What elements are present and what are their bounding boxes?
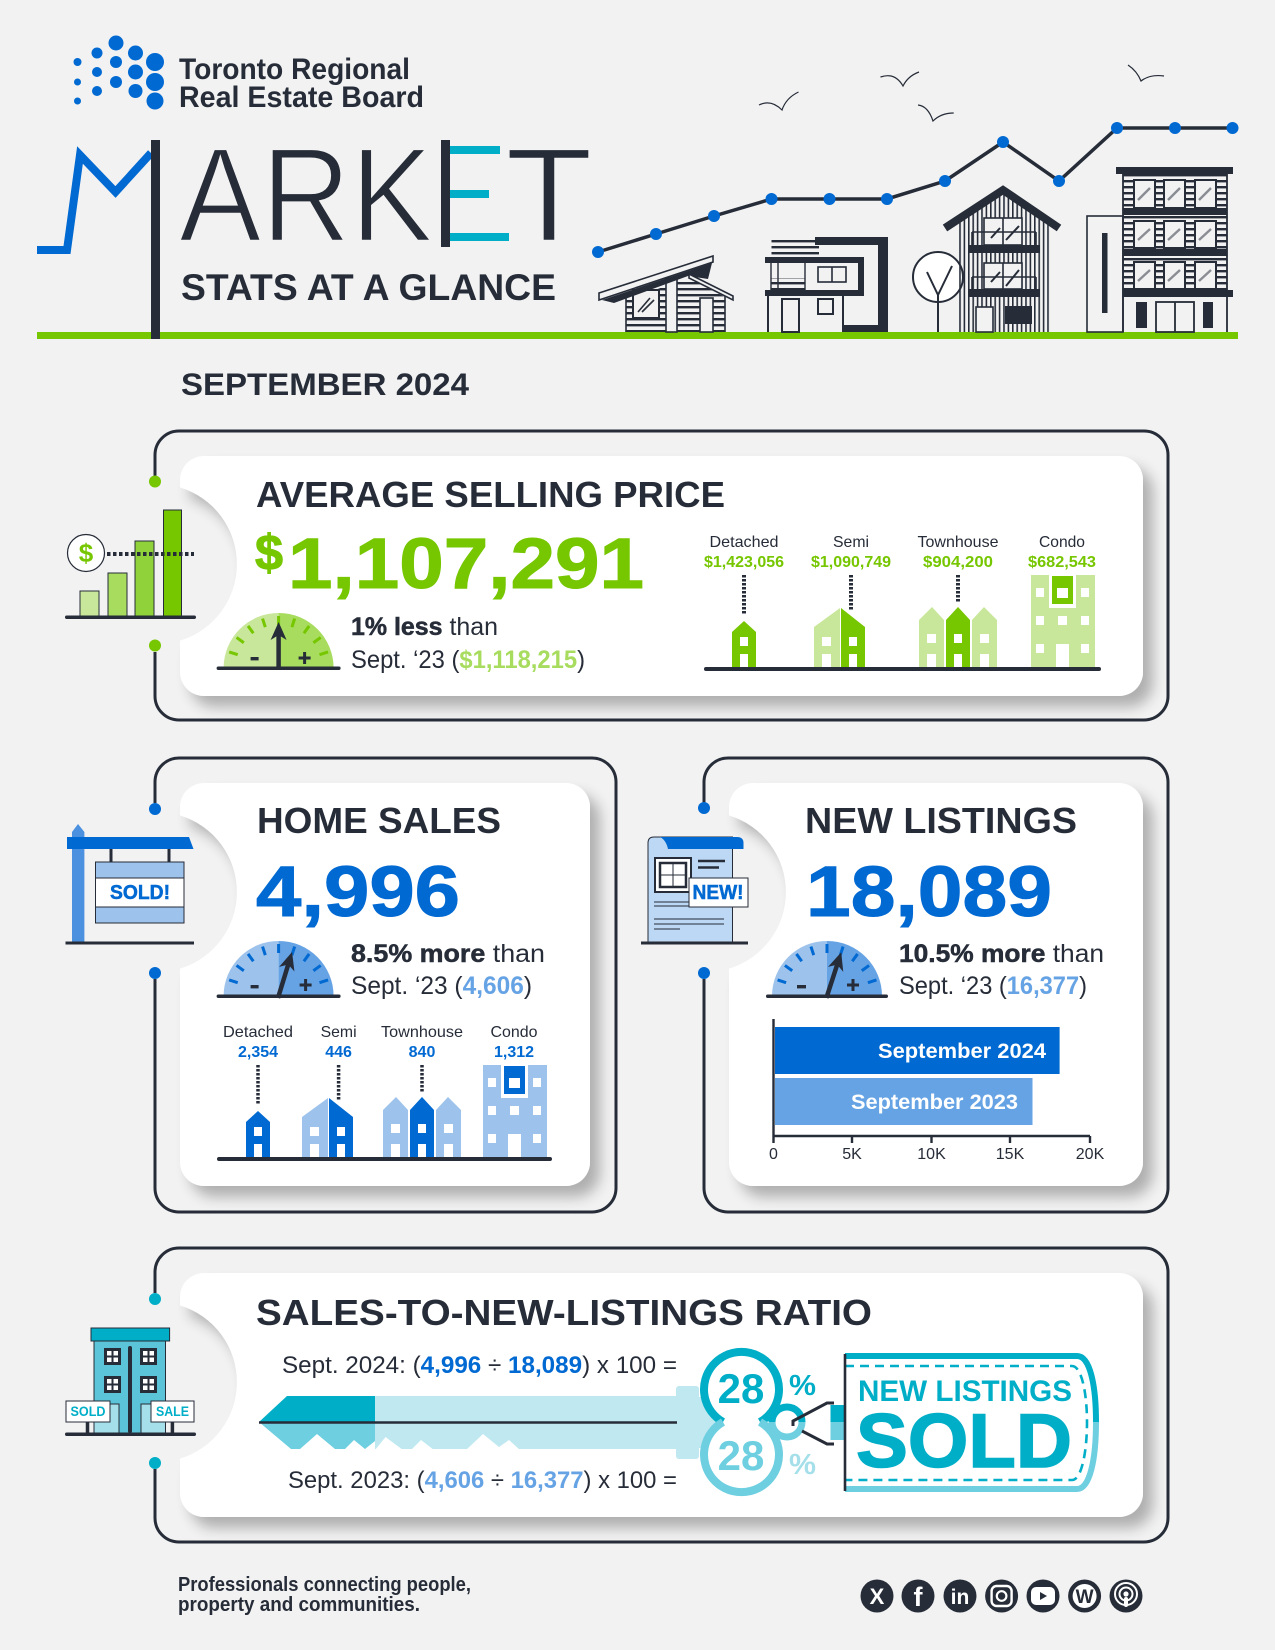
heading: SALES-TO-NEW-LISTINGS RATIO — [256, 1292, 872, 1333]
breakdown by home type: 1,312 — [494, 1044, 534, 1061]
white card — [729, 783, 1143, 1186]
logo: Toronto Regional Real Estate Board — [74, 36, 424, 114]
gauge — [217, 613, 341, 670]
axes — [774, 1019, 1090, 1143]
connector dot top — [149, 1293, 161, 1305]
icon: LinkedIn — [944, 1580, 976, 1612]
title: MARKET — [37, 121, 593, 270]
letter T: T — [505, 121, 593, 270]
result ring 2024: 28%: 28 — [718, 1365, 764, 1412]
connector dot top — [698, 802, 710, 814]
icon: townhouse — [383, 1097, 461, 1157]
icon: Instagram — [985, 1580, 1018, 1612]
logo text: Real Estate Board — [179, 81, 424, 114]
heading: HOME SALES — [257, 800, 501, 841]
white card — [180, 456, 1143, 696]
subtitle: STATS AT A GLANCE — [181, 267, 556, 308]
big number: $ — [255, 525, 283, 581]
panel outline — [155, 431, 1168, 720]
icon: new listing document: NEW! — [692, 882, 744, 904]
social icons — [860, 1580, 1142, 1612]
icon: detached — [732, 621, 756, 667]
big number: 18,089 — [806, 853, 1052, 932]
axis labels: 10K — [917, 1146, 946, 1163]
bar: September 2023: September 2023 — [851, 1091, 1018, 1114]
breakdown by home type: $904,200 — [923, 554, 993, 571]
tag: new listings sold: SOLD — [856, 1399, 1072, 1484]
icon: townhouse — [919, 607, 997, 667]
icon: YouTube — [1026, 1580, 1060, 1612]
icon: condo with sold and sale signs: SOLD — [70, 1403, 106, 1419]
house 1: cabin — [599, 256, 733, 332]
icon: condo — [1031, 575, 1095, 667]
comparison text — [351, 613, 585, 674]
icon: detached — [246, 1111, 270, 1157]
panel: home sales — [66, 758, 616, 1212]
heading: NEW LISTINGS — [805, 800, 1077, 841]
letters ARK: ARK — [179, 121, 433, 270]
icon: condo — [483, 1065, 547, 1157]
panel: average selling price — [65, 431, 1168, 720]
breakdown by home type: Semi — [321, 1024, 357, 1041]
title post — [151, 140, 160, 339]
comparison text: 1% less than — [351, 613, 498, 641]
comparison text: Sept. ‘23 ($1,118,215) — [351, 646, 585, 674]
connector dot top — [149, 476, 161, 488]
tag: new listings sold — [830, 1354, 1096, 1491]
white card — [180, 1273, 1143, 1517]
icon: condo with sold and sale signs — [65, 1328, 196, 1436]
result ring 2023: 28% — [704, 1422, 816, 1492]
connector dot bottom — [149, 967, 161, 979]
letter E — [441, 140, 509, 247]
icon: WordPress: W — [1076, 1587, 1094, 1608]
heading: AVERAGE SELLING PRICE — [256, 474, 725, 515]
icon: sold sign: SOLD! — [110, 882, 170, 904]
icon: X: X — [870, 1584, 885, 1609]
icon: WordPress — [1068, 1580, 1101, 1612]
tag string — [793, 1403, 834, 1444]
axis labels: 5K — [842, 1146, 862, 1163]
letter M as blue line graph — [37, 153, 151, 250]
date: SEPTEMBER 2024 — [181, 366, 470, 402]
logo text — [179, 53, 424, 114]
icon: X — [860, 1580, 894, 1612]
tagline: Professionals connecting people, — [178, 1574, 471, 1596]
comparison text: Sept. ‘23 (4,606) — [351, 972, 532, 1000]
comparison text: 8.5% more than — [351, 940, 545, 968]
house 4: apartment building — [1087, 167, 1233, 332]
axis labels — [769, 1146, 1105, 1163]
gauge — [217, 941, 341, 1000]
breakdown by home type: $1,423,056 — [704, 554, 784, 571]
breakdown by home type: 2,354 — [238, 1044, 278, 1061]
ground line — [37, 332, 1238, 339]
comparison text — [351, 940, 545, 1000]
icon: podcast — [1110, 1580, 1142, 1612]
panel: sales-to-new-listings ratio — [65, 1248, 1168, 1542]
tree — [913, 252, 963, 332]
birds — [759, 65, 1164, 121]
logo text: Toronto Regional — [179, 53, 410, 86]
icon: condo with sold and sale signs: SALE — [156, 1403, 189, 1419]
breakdown by home type: 840 — [409, 1044, 435, 1061]
big number: 4,996 — [256, 853, 460, 932]
result ring 2024: 28% — [704, 1352, 816, 1422]
icon: semi — [302, 1098, 353, 1157]
key ring — [772, 1407, 802, 1437]
icon: Facebook — [902, 1580, 934, 1612]
panel outline — [155, 758, 616, 1212]
connector dot bottom — [149, 1457, 161, 1469]
breakdown by home type: $682,543 — [1028, 554, 1096, 571]
bar: September 2024: September 2024 — [878, 1040, 1046, 1063]
tag: new listings sold: NEW LISTINGS — [858, 1375, 1072, 1408]
breakdown by home type: 446 — [325, 1044, 352, 1061]
house 2: modern — [765, 237, 888, 332]
icon: price bars with dollar: $ — [79, 538, 94, 568]
tagline — [178, 1574, 471, 1616]
white card — [180, 783, 590, 1186]
breakdown by home type: Townhouse — [381, 1024, 463, 1041]
icon: LinkedIn: in — [951, 1586, 969, 1609]
breakdown by home type: Detached — [710, 534, 778, 551]
breakdown by home type: Condo — [490, 1024, 538, 1041]
result ring 2023: 28%: 28 — [718, 1432, 764, 1479]
result ring 2023: 28%: % — [789, 1449, 816, 1481]
comparison text: Sept. ‘23 (16,377) — [899, 972, 1087, 1000]
comparison text: 10.5% more than — [899, 940, 1104, 968]
tagline: property and communities. — [178, 1594, 420, 1616]
icon: Facebook: f — [914, 1582, 924, 1612]
breakdown by home type — [217, 1024, 552, 1161]
bar: September 2023 — [775, 1078, 1032, 1125]
connector dot bottom — [698, 967, 710, 979]
axis labels: 15K — [996, 1146, 1025, 1163]
breakdown by home type: $1,090,749 — [811, 554, 891, 571]
breakdown by home type: Detached — [223, 1024, 293, 1041]
result ring 2024: 28%: % — [789, 1370, 816, 1402]
breakdown by home type — [704, 534, 1101, 671]
connector dot top — [149, 803, 161, 815]
line chart over houses — [592, 122, 1238, 258]
panel outline — [155, 1248, 1168, 1542]
icon: price bars with dollar — [65, 510, 196, 619]
breakdown by home type: Townhouse — [918, 534, 999, 551]
breakdown by home type: Condo — [1039, 534, 1085, 551]
panel: new listings — [641, 758, 1168, 1212]
icon: new listing document — [641, 837, 748, 944]
formula 2024: Sept. 2024: (4,996 ÷ 18,089) x 100 = — [282, 1352, 677, 1379]
axis labels: 20K — [1076, 1146, 1105, 1163]
icon: semi — [814, 608, 865, 667]
house 3: gabled — [945, 190, 1059, 332]
gauge — [766, 941, 888, 1000]
connector dot bottom — [149, 640, 161, 652]
axis labels: 0 — [769, 1146, 778, 1163]
comparison text — [899, 940, 1104, 1000]
big number: 1,107,291 — [288, 525, 644, 604]
icon: sold sign — [66, 824, 194, 944]
bar: September 2024 — [775, 1027, 1060, 1074]
formula 2023: Sept. 2023: (4,606 ÷ 16,377) x 100 = — [288, 1467, 677, 1494]
logo dots — [74, 36, 164, 110]
panel outline — [704, 758, 1168, 1212]
key graphic — [259, 1386, 745, 1459]
bar chart — [769, 1019, 1105, 1163]
breakdown by home type: Semi — [833, 534, 869, 551]
